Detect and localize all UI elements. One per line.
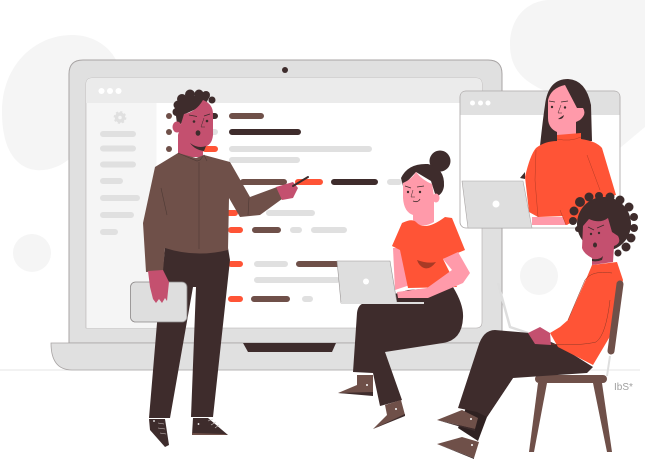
seated woman ear: [432, 194, 440, 202]
seated person face and neck: [582, 218, 619, 265]
laptop base: [51, 343, 520, 370]
presenter left hand: [148, 270, 169, 303]
sidebar: [86, 103, 156, 328]
presenter shirt: [143, 153, 282, 272]
window control dots: [470, 100, 490, 106]
seated woman shirt: [392, 217, 465, 288]
seated woman face and neck: [403, 172, 434, 226]
woman arms: [532, 217, 568, 225]
list rows: [205, 116, 399, 299]
background blobs: [2, 0, 645, 295]
secondary window: [460, 91, 620, 228]
woman neck and face: [548, 85, 584, 137]
presenter collar and seams: [161, 153, 249, 249]
window frame: [460, 91, 620, 228]
laptop notch: [243, 343, 336, 352]
seated person pants: [458, 330, 593, 417]
seated woman hair: [401, 164, 444, 197]
seated woman face details: [405, 186, 424, 202]
sweater seams: [550, 272, 612, 345]
webcam: [282, 67, 288, 73]
shirt shadow: [417, 260, 436, 268]
side laptop: [498, 283, 528, 333]
seated person face details: [588, 225, 604, 261]
seated woman laptop: [337, 261, 424, 304]
woman forearm: [560, 192, 615, 225]
presenter left shoe: [149, 419, 169, 447]
sidebar menu items: [103, 134, 137, 232]
person: seated person with curly hair: [437, 192, 638, 459]
seated person shoes: [437, 410, 479, 458]
presenter pants: [149, 248, 230, 418]
presenter right shoe: [192, 418, 228, 435]
laptop screen: [86, 78, 482, 328]
woman sweater: [525, 133, 616, 217]
window control dots: [98, 88, 122, 94]
person: seated woman with bun: [337, 150, 470, 429]
tablet: [130, 282, 187, 322]
ground line: [0, 369, 640, 371]
woman face details: [549, 101, 568, 119]
seated person far leg: [458, 372, 513, 441]
woman laptop: [462, 181, 532, 228]
pointer: [293, 177, 308, 186]
chair legs and seat: [529, 375, 612, 452]
laptop: [51, 60, 520, 370]
seated person sweater: [550, 262, 623, 365]
presenter right hand: [276, 182, 298, 200]
laptop logo: [492, 200, 500, 208]
presenter ear: [172, 122, 182, 132]
seated woman shoes: [338, 375, 405, 429]
laptop lid: [69, 60, 502, 343]
presenter hair curls: [172, 90, 216, 124]
sweater seams: [535, 137, 600, 225]
icon: gear: [114, 112, 126, 123]
seated person hand: [528, 327, 551, 345]
seated woman left arm: [393, 248, 410, 290]
seated woman forearm: [397, 252, 470, 298]
presenter face and neck: [178, 100, 213, 157]
list bullets: [166, 113, 172, 152]
hair bun: [430, 150, 450, 172]
person: woman on video window: [462, 79, 616, 228]
chair back: [607, 284, 620, 376]
seated woman pants: [353, 287, 463, 406]
credit text: IbS*: [614, 382, 633, 393]
person: presenter: [130, 90, 308, 447]
seated person hair: [569, 192, 638, 256]
woman hair: [540, 79, 592, 146]
presenter face details: [189, 114, 210, 151]
shoe laces: [153, 419, 219, 434]
screen title bar: [86, 78, 482, 103]
window title bar: [460, 92, 620, 115]
